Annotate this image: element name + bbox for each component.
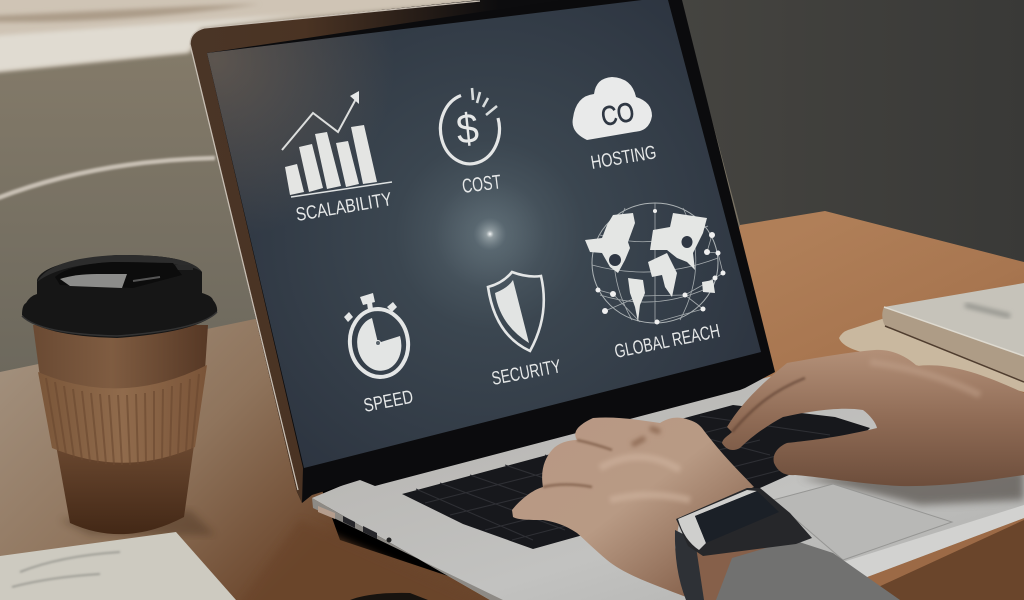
icon: scalability — [282, 91, 394, 226]
lid rim highlight — [190, 1, 480, 490]
keyboard — [402, 405, 870, 549]
table top — [0, 211, 1024, 600]
right hand — [722, 350, 1024, 486]
label: scalability: SCALABILITY — [294, 189, 394, 226]
cup lower body — [56, 445, 194, 534]
smartwatch — [675, 488, 812, 600]
label: hosting: HOSTING — [589, 142, 658, 174]
lens glare — [435, 179, 545, 289]
watch case — [676, 488, 812, 556]
icon: shield — [488, 272, 563, 390]
chair back — [0, 158, 215, 198]
label: security: SECURITY — [490, 356, 563, 390]
cup upper body — [33, 325, 208, 404]
coffee cup — [22, 255, 217, 535]
books — [839, 283, 1024, 392]
label: speed: SPEED — [362, 387, 415, 417]
watch bezel highlight — [678, 490, 757, 550]
cup lid — [22, 255, 217, 338]
wrist skin — [690, 530, 795, 600]
icon: cost: $ — [454, 104, 481, 153]
label: cost: COST — [461, 171, 502, 198]
left hand — [512, 417, 754, 597]
watch screen — [695, 491, 779, 543]
label: global reach: GLOBAL REACH — [613, 321, 722, 363]
icon: stopwatch — [344, 293, 415, 417]
trackpad — [773, 484, 952, 560]
laptop lid — [190, 0, 775, 503]
finger creases — [732, 378, 805, 432]
phone on table — [350, 593, 428, 600]
continents — [585, 213, 635, 273]
cup sleeve — [38, 365, 207, 463]
cup shadow — [60, 510, 215, 535]
upper book — [884, 283, 1024, 356]
background wall — [0, 0, 1024, 400]
screen — [207, 0, 761, 468]
icon: hosting cloud — [573, 77, 658, 174]
icon: hosting cloud: CO — [599, 97, 637, 132]
notepaper — [0, 532, 236, 600]
icon: global reach world map — [585, 203, 726, 363]
watch band — [675, 530, 704, 600]
sleeve — [716, 540, 900, 600]
hand shadow on base — [800, 470, 1024, 505]
front lip — [843, 505, 1024, 577]
finger creases and knuckles — [543, 440, 612, 487]
lower book — [839, 318, 1024, 392]
laptop base — [312, 376, 1024, 600]
front edge with ports — [312, 498, 503, 600]
icon: cost — [440, 88, 502, 198]
